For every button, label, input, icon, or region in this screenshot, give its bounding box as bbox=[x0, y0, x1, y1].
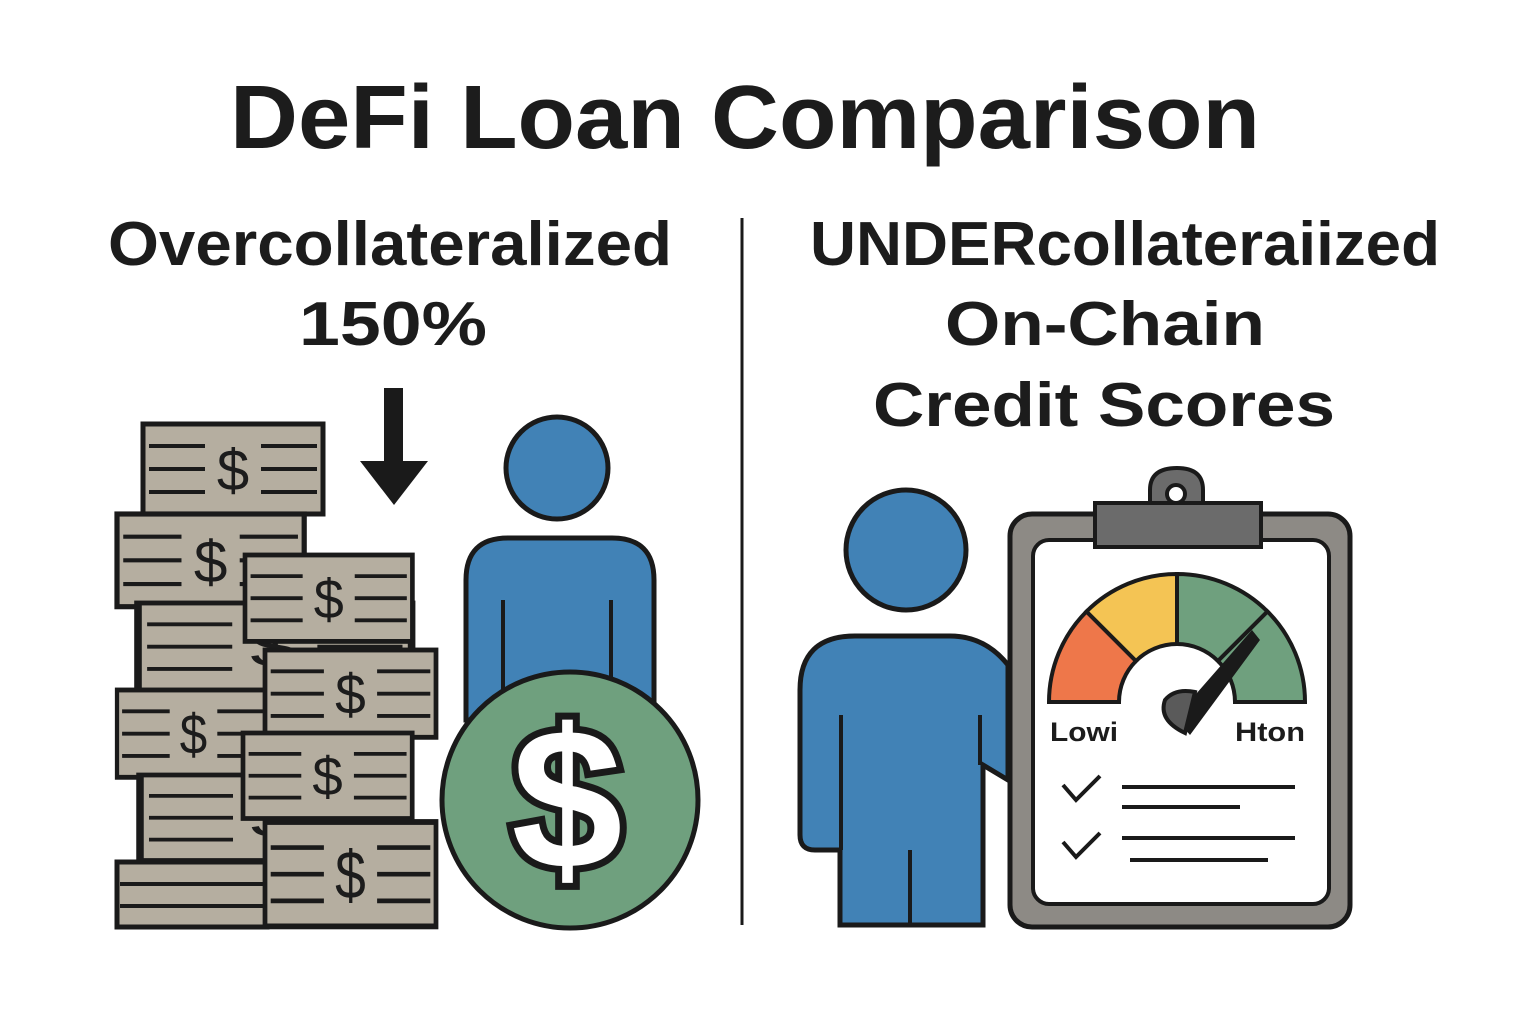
gauge needle bbox=[1164, 630, 1260, 735]
panel: overcollateralized bbox=[108, 210, 698, 928]
icon: person right bbox=[800, 490, 1008, 925]
divider bbox=[740, 218, 744, 925]
heading: undercollateralized: UNDERcollateraiized bbox=[810, 210, 1440, 279]
checklist bbox=[1063, 776, 1295, 860]
icon: dollar coin bbox=[442, 672, 698, 928]
icon: dollar coin: $ bbox=[511, 688, 623, 911]
heading: 150%: 150% bbox=[299, 290, 487, 359]
icon: person left bbox=[466, 417, 654, 720]
arrow: down bbox=[360, 388, 428, 505]
gauge label low: Lowi bbox=[1050, 717, 1118, 747]
heading: on-chain: On-Chain bbox=[945, 290, 1265, 359]
heading: overcollateralized: Overcollateralized bbox=[108, 210, 672, 279]
icon: clipboard with credit gauge bbox=[1010, 468, 1350, 927]
gauge label high: Hton bbox=[1235, 717, 1305, 747]
heading: credit scores: Credit Scores bbox=[873, 371, 1335, 440]
title: DeFi Loan Comparison bbox=[230, 68, 1260, 168]
panel: undercollateralized bbox=[800, 210, 1440, 927]
icon: stack of bills bbox=[117, 424, 436, 927]
gauge bbox=[1049, 574, 1305, 702]
